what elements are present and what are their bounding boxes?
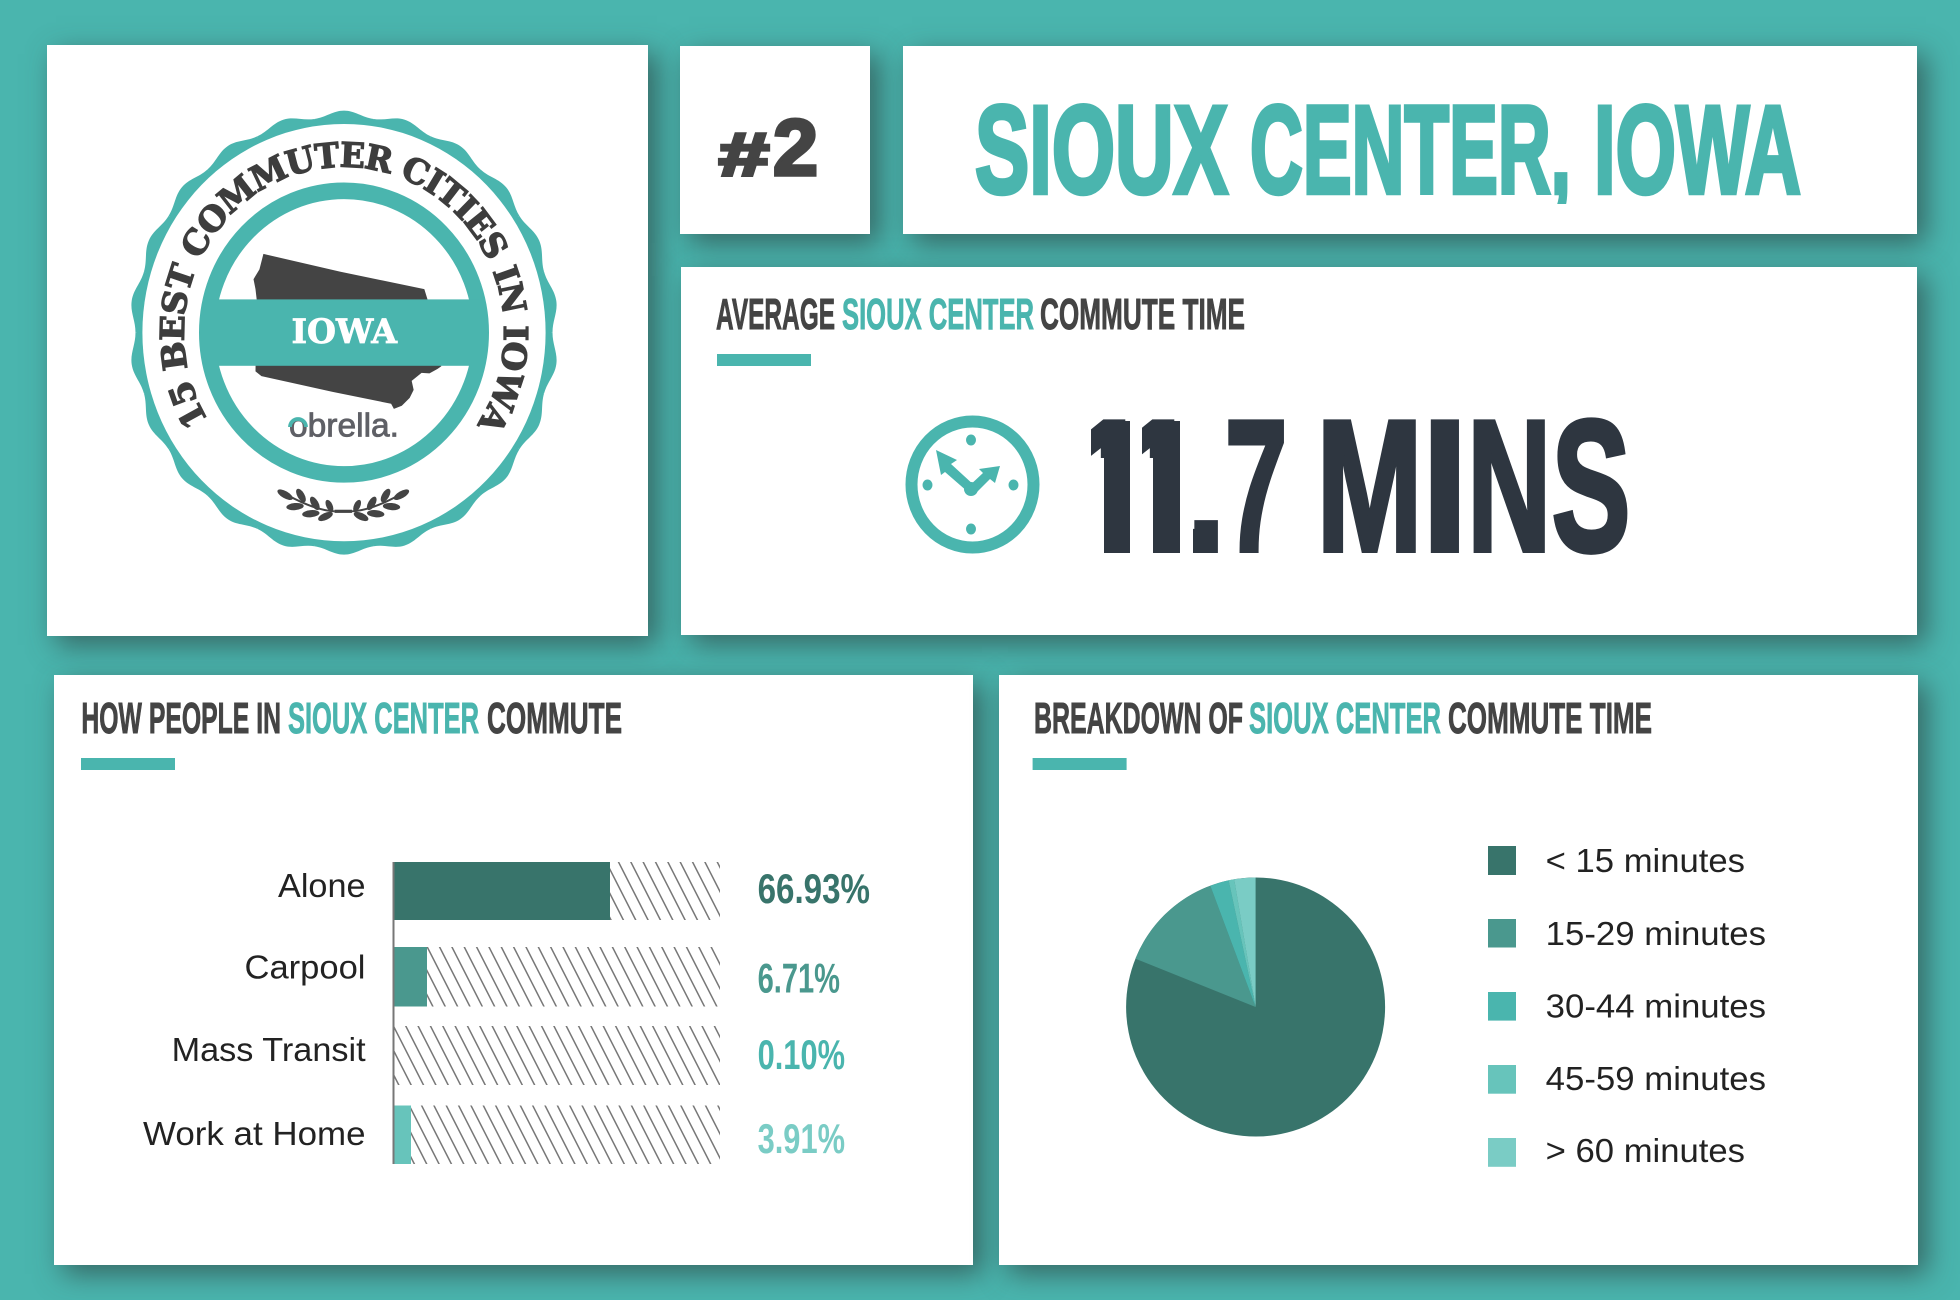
row: Alone: 66.93% bbox=[758, 865, 870, 912]
row: Mass Transit bbox=[172, 1026, 845, 1085]
badge: 15 best commuter cities in Iowa: 15 BEST COMMUTER CITIES IN IOWA bbox=[159, 141, 529, 428]
title: CENTER, bbox=[1250, 81, 1571, 220]
heading: COMMUTE TIME bbox=[1040, 290, 1245, 339]
heading underline bbox=[1033, 758, 1127, 770]
row: Carpool: 6.71% bbox=[758, 955, 840, 1002]
legend: > 60 minutes bbox=[1546, 1132, 1745, 1169]
big number: 1 bbox=[1117, 382, 1200, 590]
row: Work at Home: Work at Home bbox=[143, 1115, 366, 1152]
big number: M bbox=[1317, 382, 1423, 590]
heading underline bbox=[81, 758, 175, 770]
panel: city title bbox=[903, 46, 1917, 234]
heading: SIOUX CENTER bbox=[842, 290, 1034, 339]
laurel bbox=[276, 487, 411, 523]
pie chart bbox=[1126, 878, 1385, 1136]
legend bbox=[1488, 842, 1766, 1169]
panel: commute time breakdown bbox=[999, 675, 1918, 1265]
chart axis bbox=[392, 862, 394, 1164]
big number: N bbox=[1467, 382, 1551, 590]
legend: 15-29 minutes bbox=[1546, 915, 1766, 952]
heading bbox=[81, 694, 622, 743]
big number: . bbox=[1187, 382, 1226, 590]
rank number: # bbox=[719, 121, 769, 188]
Iowa state silhouette bbox=[254, 254, 441, 409]
heading: AVERAGE bbox=[716, 290, 835, 339]
big number: 7 bbox=[1225, 382, 1287, 590]
big number bbox=[1055, 382, 1630, 590]
big number: S bbox=[1552, 382, 1630, 590]
legend: < 15 minutes bbox=[1546, 842, 1745, 879]
heading: COMMUTE TIME bbox=[1448, 694, 1652, 743]
panel: average commute time bbox=[681, 267, 1917, 635]
heading bbox=[1034, 694, 1652, 743]
title: SIOUX bbox=[975, 81, 1228, 220]
ribbon label: IOWA bbox=[292, 312, 398, 352]
heading bbox=[716, 290, 1245, 339]
rank number bbox=[719, 103, 818, 192]
panel: rank bbox=[680, 46, 870, 234]
heading: HOW PEOPLE IN bbox=[81, 694, 281, 743]
heading: BREAKDOWN OF bbox=[1034, 694, 1243, 743]
ribbon band bbox=[209, 299, 479, 366]
big number: I bbox=[1422, 382, 1468, 590]
obrella logo: obrella. bbox=[289, 406, 399, 444]
title bbox=[975, 81, 1801, 220]
big number: 1 bbox=[1068, 382, 1151, 590]
icon: clock bbox=[912, 422, 1034, 548]
heading: COMMUTE bbox=[487, 694, 622, 743]
row: Work at Home: 3.91% bbox=[758, 1115, 845, 1162]
row: Mass Transit: 0.10% bbox=[758, 1031, 845, 1078]
row: Mass Transit: Mass Transit bbox=[172, 1031, 366, 1068]
heading: SIOUX CENTER bbox=[1249, 694, 1441, 743]
heading: SIOUX CENTER bbox=[288, 694, 479, 743]
row: Alone: Alone bbox=[278, 867, 366, 904]
heading underline bbox=[717, 354, 811, 366]
row: Carpool: Carpool bbox=[244, 948, 366, 986]
legend: 45-59 minutes bbox=[1546, 1060, 1766, 1097]
panel: badge bbox=[47, 45, 648, 636]
rank number: 2 bbox=[773, 103, 818, 192]
row: Alone bbox=[278, 862, 870, 920]
panel: how people commute bbox=[54, 675, 973, 1265]
badge: 15 best commuter cities in Iowa bbox=[131, 110, 557, 555]
row: Carpool bbox=[244, 947, 840, 1006]
row: Work at Home bbox=[143, 1106, 845, 1164]
legend: 30-44 minutes bbox=[1546, 988, 1766, 1024]
